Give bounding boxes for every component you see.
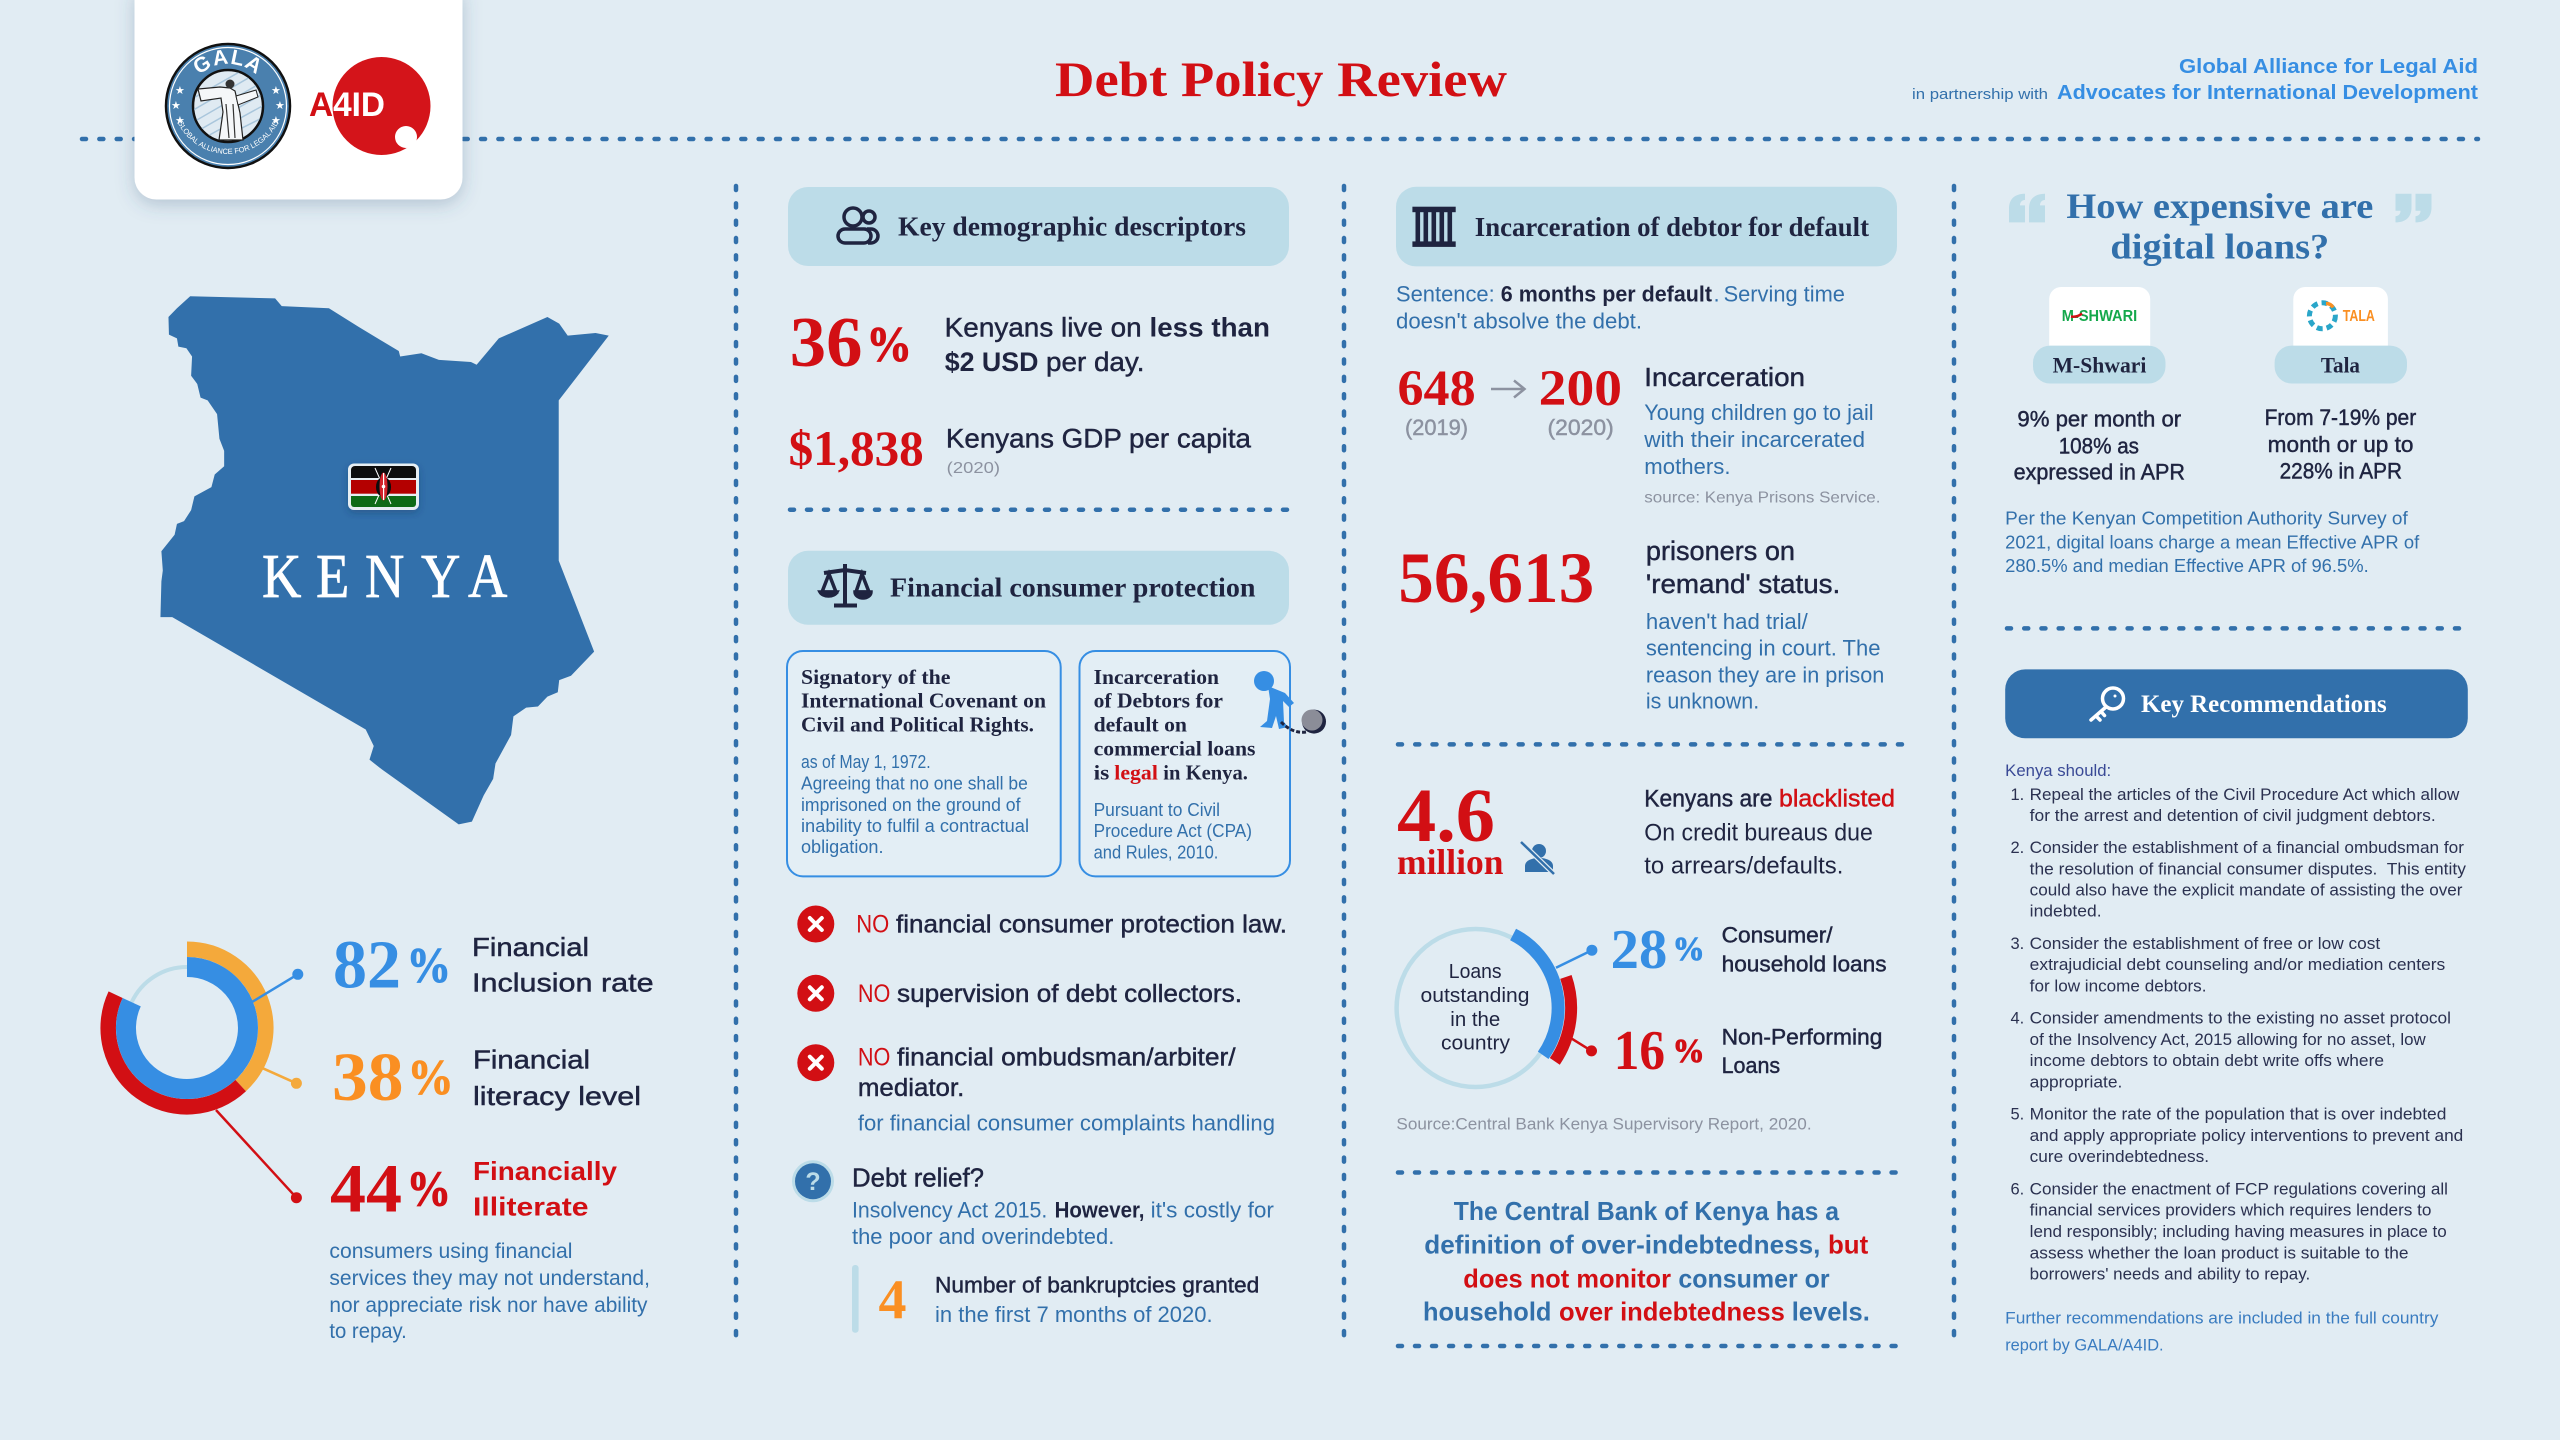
stat: 38% financial literacy <box>332 1039 641 1115</box>
text: illiteracy explanation: consumers using financial <box>329 1240 572 1263</box>
list item: no ombudsman: NO <box>858 1043 890 1071</box>
map label: KENYA <box>262 542 507 611</box>
list item: no consumer protection law: NO <box>856 911 889 939</box>
stat: incarceration 648 to 200: Young children go to jail <box>1644 400 1874 425</box>
stat: 16% non-performing loans: % <box>1673 1033 1705 1070</box>
icon: crossed-out person <box>1521 842 1554 874</box>
list item 3: extrajudicial debt counseling and/or mediation centers <box>2030 956 2445 974</box>
stat: 28% consumer loans <box>1611 919 1887 981</box>
partner credits: in partnership with <box>1912 86 2048 103</box>
stat: 28% consumer loans: 28 <box>1611 919 1667 981</box>
stat: bankruptcies granted <box>852 1265 1259 1333</box>
partner credits: Global Alliance for Legal Aid <box>2179 56 2478 78</box>
icon: GALA seal: ★ <box>175 85 185 97</box>
panel: covenant signatory: International Covenant on <box>801 688 1046 712</box>
stat: 38% financial literacy: literacy level <box>473 1081 641 1111</box>
stat: 36% below $2: Kenyans live on <box>945 312 1142 342</box>
logo card <box>125 0 472 214</box>
callout: central bank statement: consumer or <box>1678 1263 1830 1293</box>
stat: 4.6 million blacklisted: 4.6 <box>1397 774 1495 858</box>
stat: 38% financial literacy: % <box>408 1048 454 1104</box>
icon: Kenya flag <box>348 464 419 510</box>
panel: M-Shwari rate <box>2014 287 2185 485</box>
panel: Tala rate: TALA <box>2343 308 2375 325</box>
list item 2 <box>2010 839 2467 921</box>
icon: prison bars <box>1412 207 1456 247</box>
panel: incarceration heading <box>1396 187 1897 266</box>
debt relief block: the poor and overindebted. <box>852 1224 1114 1249</box>
chart: loans outstanding: in the <box>1450 1009 1500 1031</box>
panel: financial consumer protection heading <box>788 551 1289 625</box>
panel: Tala rate: From 7-19% per <box>2265 405 2416 430</box>
list item: no consumer protection law <box>797 906 1287 942</box>
stat: 82% financial inclusion: Inclusion rate <box>472 968 654 998</box>
stat: 38% financial literacy: 38 <box>332 1039 404 1115</box>
panel: incarceration legality: is <box>1094 761 1109 785</box>
text: competition authority survey: Per the Kenyan Competition Authority Survey of <box>2005 508 2409 528</box>
stat: 4.6 million blacklisted: On credit bureaus due <box>1644 819 1873 846</box>
list item 5: 5. <box>2010 1106 2024 1124</box>
stat: GDP per capita: $1,838 <box>789 420 924 476</box>
stat: 28% consumer loans: % <box>1673 931 1705 968</box>
list item 2: Consider the establishment of a financial ombudsman for <box>2030 839 2465 857</box>
stat: 16% non-performing loans <box>1614 1020 1882 1082</box>
panel: covenant signatory: imprisoned on the ground of <box>801 795 1021 815</box>
icon: scales <box>820 564 871 606</box>
list item 2: indebted. <box>2030 903 2102 921</box>
icon: A4ID logo <box>309 57 430 155</box>
list item 4: income debtors to obtain debt write offs where <box>2030 1052 2384 1070</box>
icon: GALA seal: GLOBAL ALLIANCE FOR LEGAL AID <box>178 120 278 154</box>
stat: bankruptcies granted: in the first 7 months of 2020. <box>935 1302 1213 1327</box>
icon: GALA seal: GALA <box>194 50 260 74</box>
panel: incarceration legality: of Debtors for <box>1094 688 1223 712</box>
stat: remand prisoners: haven't had trial/ <box>1646 609 1809 634</box>
stat: 36% below $2 <box>790 304 1270 382</box>
text: sentence length: Sentence: <box>1396 282 1495 307</box>
list item 3: Consider the establishment of free or low cost <box>2030 935 2381 953</box>
list item 5 <box>2010 1106 2463 1166</box>
stat: incarceration 648 to 200: with their incarcerated <box>1643 427 1865 452</box>
stat: GDP per capita: Kenyans GDP per capita <box>946 423 1252 453</box>
stat: 36% below $2: % <box>866 316 912 372</box>
list item: no ombudsman <box>797 1043 1275 1136</box>
list item 4: Consider amendments to the existing no asset protocol <box>2030 1010 2451 1028</box>
icon: GALA seal: ★ <box>171 100 181 112</box>
list item 6: 6. <box>2010 1180 2024 1198</box>
stat: incarceration 648 to 200: Incarceration <box>1644 362 1805 392</box>
panel: covenant signatory: Signatory of the <box>801 665 950 689</box>
panel: M-Shwari rate: 9% per month or <box>2017 407 2181 432</box>
stat: incarceration 648 to 200: source: Kenya Prisons Service. <box>1644 490 1880 506</box>
panel: incarceration legality <box>1080 651 1326 876</box>
icon: GALA seal: ★ <box>275 100 285 112</box>
stat: 4.6 million blacklisted <box>1397 774 1895 882</box>
list item 3: 3. <box>2010 935 2024 953</box>
panel: key recommendations heading: Key Recommendations <box>2141 691 2387 718</box>
stat: bankruptcies granted: Number of bankruptcies granted <box>935 1273 1259 1298</box>
chart: loans outstanding: country <box>1441 1033 1510 1055</box>
stat: 4.6 million blacklisted: to arrears/defaults. <box>1644 852 1843 879</box>
title: Debt Policy Review <box>1055 51 1507 107</box>
list item 6: Consider the enactment of FCP regulations covering all <box>2030 1180 2448 1198</box>
list item 1 <box>2010 786 2459 825</box>
list item 1: for the arrest and detention of civil judgment debtors. <box>2030 807 2436 825</box>
list item: no consumer protection law: financial consumer protection law. <box>896 911 1287 939</box>
stat: 44% financially illiterate: 44 <box>330 1151 402 1227</box>
list item 2: could also have the explicit mandate of assisting the over <box>2030 882 2463 900</box>
partner credits <box>1912 56 2478 104</box>
text: further recommendations note: Further recommendations are included in the full country <box>2005 1309 2439 1328</box>
stat: 4.6 million blacklisted: Kenyans are <box>1644 786 1772 813</box>
list item 5: and apply appropriate policy interventions to prevent and <box>2030 1127 2463 1145</box>
icon: A4ID logo: A4ID <box>309 86 385 124</box>
callout: central bank statement: over indebtedness <box>1559 1297 1785 1327</box>
arrow <box>1491 380 1524 398</box>
list item: no ombudsman: financial ombudsman/arbiter/ <box>897 1043 1236 1071</box>
panel: incarceration legality: Pursuant to Civil <box>1094 800 1220 820</box>
callout: central bank statement: The Central Bank of Kenya has a <box>1454 1196 1840 1226</box>
stat: incarceration 648 to 200: (2019) <box>1405 415 1468 440</box>
stat: 82% financial inclusion: Financial <box>472 932 589 962</box>
panel: covenant signatory: Agreeing that no one shall be <box>801 774 1028 794</box>
debt relief block <box>792 1160 1274 1249</box>
list item 2: the resolution of financial consumer disputes. This entity <box>2030 860 2467 878</box>
list item 4 <box>2010 1010 2451 1091</box>
panel: M-Shwari rate: M-Shwari <box>2053 352 2146 377</box>
text: sentence length <box>1396 282 1845 333</box>
stat: 28% consumer loans: Consumer/ <box>1722 922 1834 948</box>
stat: 16% non-performing loans: 16 <box>1614 1020 1665 1082</box>
text: illiteracy explanation: to repay. <box>329 1320 407 1343</box>
panel: incarceration legality: legal <box>1114 761 1158 785</box>
debt relief block: it's costly for <box>1151 1197 1274 1222</box>
list item: no ombudsman: mediator. <box>858 1074 964 1102</box>
stat: 16% non-performing loans: Loans <box>1722 1053 1780 1078</box>
stat: 36% below $2: per day. <box>1046 347 1144 377</box>
panel: covenant signatory: as of May 1, 1972. <box>801 752 931 772</box>
list item: no debt collector supervision: NO <box>858 980 890 1008</box>
panel: M-Shwari rate: expressed in APR <box>2014 460 2185 485</box>
stat: GDP per capita: (2020) <box>947 460 1000 477</box>
text: competition authority survey: 2021, digital loans charge a mean Effective APR of <box>2005 532 2420 552</box>
heading: how expensive are digital loans: digital loans? <box>2110 226 2329 266</box>
text: further recommendations note <box>2005 1309 2439 1355</box>
text: illiteracy explanation <box>329 1240 650 1343</box>
heading: how expensive are digital loans <box>2009 186 2432 266</box>
chart: loans outstanding: outstanding <box>1420 985 1530 1007</box>
debt relief block: Debt relief? <box>852 1163 984 1193</box>
panel: Tala rate: month or up to <box>2268 432 2414 457</box>
chart: loans outstanding <box>1397 929 1597 1087</box>
stat: 38% financial literacy: Financial <box>473 1044 590 1074</box>
text: competition authority survey <box>2005 508 2420 576</box>
debt relief block: However, <box>1055 1197 1144 1222</box>
stat: 82% financial inclusion: 82 <box>333 927 401 1003</box>
stat: 4.6 million blacklisted: million <box>1397 842 1504 882</box>
stat: remand prisoners: sentencing in court. The <box>1646 636 1880 661</box>
list item 6 <box>2010 1180 2448 1284</box>
panel: incarceration legality: Procedure Act (CPA) <box>1094 821 1252 841</box>
chart: financial inclusion rings <box>108 949 303 1203</box>
stat: 44% financially illiterate <box>330 1151 618 1227</box>
panel: incarceration legality: commercial loans <box>1094 737 1256 761</box>
list item 6: borrowers' needs and ability to repay. <box>2030 1266 2310 1284</box>
icon: question mark: ? <box>805 1168 821 1196</box>
stat: 36% below $2: $2 USD <box>945 347 1038 377</box>
stat: incarceration 648 to 200: (2020) <box>1548 415 1614 440</box>
stat: remand prisoners <box>1398 536 1884 713</box>
chart: loans outstanding: Loans <box>1449 961 1502 983</box>
panel: M-Shwari rate: 108% as <box>2059 434 2139 458</box>
panel: covenant signatory: inability to fulfil a contractual <box>801 816 1029 836</box>
stat: 4.6 million blacklisted: blacklisted <box>1779 786 1895 813</box>
stat: 36% below $2: 36 <box>790 304 862 382</box>
text: sentence length: 6 months per default <box>1501 282 1713 307</box>
panel: financial consumer protection heading: Financial consumer protection <box>890 572 1256 602</box>
stat: incarceration 648 to 200 <box>1398 361 1880 506</box>
stat: remand prisoners: reason they are in prison <box>1646 662 1884 687</box>
icon: A4ID logo: A4ID <box>309 86 385 124</box>
callout: central bank statement: levels. <box>1792 1297 1870 1327</box>
list item 4: of the Insolvency Act, 2015 allowing for no asset, low <box>2030 1031 2426 1049</box>
map: Kenya <box>160 296 609 824</box>
panel: incarceration legality: default on <box>1094 712 1187 736</box>
text: recommendations list <box>2005 762 2467 1284</box>
icon: chained debtor <box>1254 671 1326 734</box>
text: illiteracy explanation: services they may not understand, <box>329 1267 650 1290</box>
text: illiteracy explanation: nor appreciate risk nor have ability <box>329 1294 648 1317</box>
panel: incarceration legality: Incarceration <box>1094 665 1219 689</box>
stat: incarceration 648 to 200: 200 <box>1539 361 1622 417</box>
callout: central bank statement: does not monitor <box>1463 1263 1671 1293</box>
stat: 44% financially illiterate: Financially <box>473 1156 618 1186</box>
stat: 16% non-performing loans: Non-Performing <box>1722 1024 1882 1049</box>
list item 6: assess whether the loan product is suitable to the <box>2030 1244 2408 1262</box>
stat: bankruptcies granted: 4 <box>878 1269 906 1331</box>
stat: remand prisoners: 56,613 <box>1398 538 1594 618</box>
panel: incarceration legality: and Rules, 2010. <box>1094 842 1218 862</box>
panel: Tala rate <box>2265 287 2416 483</box>
list item: no debt collector supervision: supervision of debt collectors. <box>897 980 1242 1008</box>
panel: key demographic descriptors heading <box>788 187 1289 266</box>
text: further recommendations note: report by GALA/A4ID. <box>2005 1336 2164 1355</box>
text: competition authority survey: 280.5% and median Effective APR of 96.5%. <box>2005 556 2369 576</box>
stat: 36% below $2: less than <box>1150 312 1270 342</box>
panel: covenant signatory: obligation. <box>801 837 884 857</box>
list item 6: financial services providers which requires lenders to <box>2030 1202 2432 1220</box>
callout: central bank statement <box>1423 1196 1870 1327</box>
list item 5: Monitor the rate of the population that is over indebted <box>2030 1106 2446 1124</box>
panel: key demographic descriptors heading: Key demographic descriptors <box>898 212 1246 242</box>
stat: remand prisoners: is unknown. <box>1646 688 1759 713</box>
list item 1: 1. <box>2010 786 2024 804</box>
list item: no debt collector supervision <box>797 975 1242 1012</box>
panel: Tala rate: 228% in APR <box>2280 458 2402 483</box>
list item 3 <box>2010 935 2445 995</box>
stat: GDP per capita <box>789 420 1252 477</box>
list item 1: Repeal the articles of the Civil Procedure Act which allow <box>2030 786 2459 804</box>
panel: incarceration heading: Incarceration of debtor for default <box>1475 212 1869 242</box>
list item 4: appropriate. <box>2030 1073 2122 1091</box>
panel: M-Shwari rate: M-SHWARI <box>2062 308 2137 325</box>
callout: central bank statement: household <box>1423 1297 1551 1327</box>
icon: closing quote <box>2396 194 2432 222</box>
icon: opening quote <box>2009 194 2045 222</box>
icon: people <box>838 208 878 243</box>
text: sentence length: Serving time <box>1724 282 1845 307</box>
panel: covenant signatory: Civil and Political Rights. <box>801 712 1034 736</box>
panel: covenant signatory <box>787 651 1061 876</box>
stat: 44% financially illiterate: % <box>407 1160 451 1216</box>
callout: central bank statement: definition of over-indebtedness, <box>1424 1230 1820 1260</box>
icon: key <box>2091 688 2124 720</box>
icon: GALA seal: ★ <box>271 115 281 127</box>
debt relief block: Insolvency Act 2015. <box>852 1197 1047 1222</box>
stat: 44% financially illiterate: Illiterate <box>473 1192 588 1222</box>
stat: 82% financial inclusion: % <box>407 937 451 993</box>
stat: remand prisoners: 'remand' status. <box>1646 569 1840 599</box>
text: sentence length: doesn't absolve the debt. <box>1396 308 1642 333</box>
panel: incarceration legality: in Kenya. <box>1163 761 1248 785</box>
icon: question mark <box>792 1160 834 1202</box>
list item: no ombudsman: for financial consumer complaints handling <box>858 1111 1275 1136</box>
source note: Source:Central Bank Kenya Supervisory Report, 2020. <box>1396 1114 1812 1133</box>
stat: 28% consumer loans: household loans <box>1722 952 1887 977</box>
icon: GALA seal <box>164 42 292 170</box>
list item 6: lend responsibly; including having measures in place to <box>2030 1223 2447 1241</box>
panel: key recommendations heading <box>2005 669 2468 738</box>
list item 2: 2. <box>2010 839 2024 857</box>
heading: how expensive are digital loans: How expensive are <box>2066 186 2373 226</box>
icon: GALA seal: ★ <box>271 85 281 97</box>
callout: central bank statement: but <box>1828 1230 1869 1260</box>
list item 3: for low income debtors. <box>2030 977 2206 995</box>
list item 4: 4. <box>2010 1010 2024 1028</box>
list item 5: cure overindebtedness. <box>2030 1148 2209 1166</box>
text: recommendations list: Kenya should: <box>2005 762 2111 780</box>
partner credits: Advocates for International Development <box>2057 82 2478 104</box>
stat: 82% financial inclusion <box>333 927 654 1003</box>
panel: Tala rate: Tala <box>2321 352 2360 377</box>
stat: remand prisoners: prisoners on <box>1646 536 1795 566</box>
stat: incarceration 648 to 200: 648 <box>1398 361 1476 417</box>
stat: incarceration 648 to 200: mothers. <box>1644 454 1730 479</box>
text: sentence length: . <box>1714 282 1720 307</box>
icon: GALA seal: ★ <box>175 115 185 127</box>
